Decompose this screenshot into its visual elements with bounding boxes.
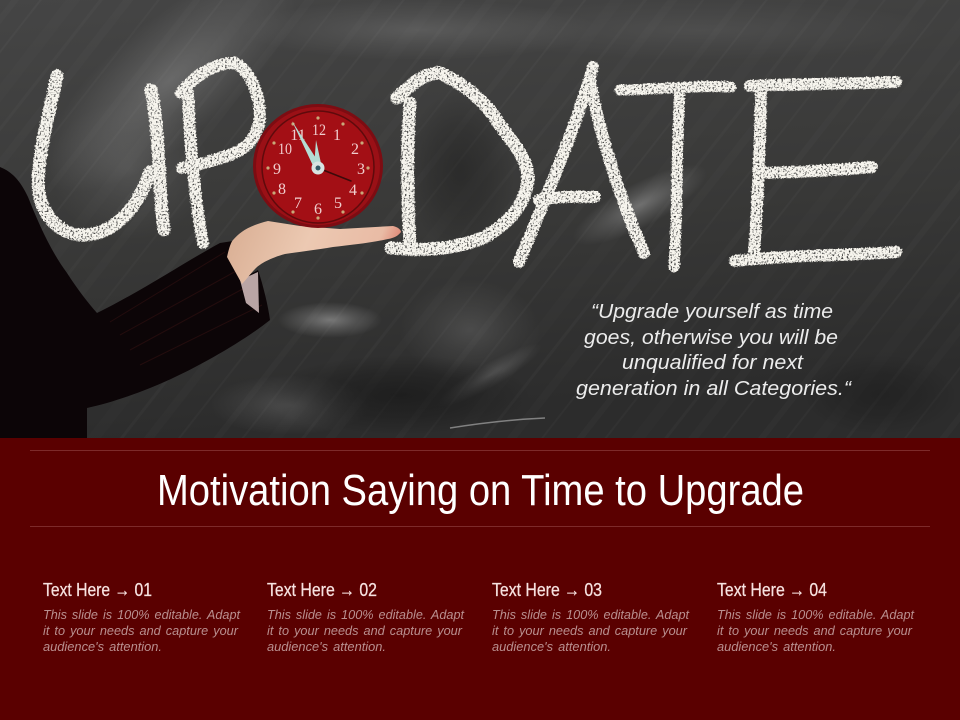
text block 04: Text Here → 04 [717, 580, 827, 600]
icon: open hand [227, 221, 401, 284]
title: Motivation Saying on Time to Upgrade [157, 466, 804, 515]
clock numerals: 3 [357, 161, 365, 178]
text block 02: This slide is 100% editable. Adapt [267, 608, 465, 622]
quote text: goes, otherwise you will be [584, 326, 838, 349]
text block 04 [717, 580, 915, 654]
text block 04: it to your needs and capture your [717, 624, 913, 638]
text block 01: Text Here → 01 [43, 580, 152, 600]
chalk letter T [620, 87, 731, 267]
clock numerals: 9 [273, 161, 281, 178]
quote text [576, 300, 852, 400]
clock numerals: 12 [312, 122, 326, 139]
icon: red alarm clock [253, 104, 383, 228]
text block 02: audience's attention. [267, 640, 386, 654]
photo: chalkboard background [0, 0, 960, 438]
panel: maroon footer [0, 438, 960, 720]
chalk letter A [519, 67, 644, 262]
chalk word: UPDATE [38, 63, 896, 267]
clock hour dots [266, 116, 370, 220]
chalk letter D [391, 73, 528, 250]
chalk letter U [38, 76, 164, 235]
text block 02: Text Here → 02 [267, 580, 377, 600]
clock hands [292, 121, 351, 181]
text block 01: it to your needs and capture your [43, 624, 239, 638]
text block 03: audience's attention. [492, 640, 611, 654]
text block 01: This slide is 100% editable. Adapt [43, 608, 241, 622]
text block 02 [267, 580, 465, 654]
text block 03 [492, 580, 690, 654]
quote text: “Upgrade yourself as time [591, 300, 833, 323]
text block 03: Text Here → 03 [492, 580, 602, 600]
chalk letter E [735, 82, 896, 261]
clock numerals: 10 [278, 141, 292, 158]
quote text: generation in all Categories.“ [576, 377, 852, 400]
clock numerals: 4 [349, 182, 357, 199]
clock numerals: 8 [278, 181, 286, 198]
chalk letter P [181, 63, 260, 243]
clock numerals [273, 122, 365, 218]
text block 01: audience's attention. [43, 640, 162, 654]
text block 04: This slide is 100% editable. Adapt [717, 608, 915, 622]
text block 03: it to your needs and capture your [492, 624, 688, 638]
text block 02: it to your needs and capture your [267, 624, 463, 638]
text block 04: audience's attention. [717, 640, 836, 654]
text block 03: This slide is 100% editable. Adapt [492, 608, 690, 622]
clock numerals: 6 [314, 201, 322, 218]
clock numerals: 2 [351, 141, 359, 158]
clock numerals: 5 [334, 195, 342, 212]
quote text: unqualified for next [622, 351, 804, 374]
clock numerals: 7 [294, 195, 302, 212]
clock numerals: 11 [290, 127, 306, 144]
clock numerals: 1 [333, 127, 341, 144]
text block 01 [43, 580, 241, 654]
icon: suited arm [0, 167, 270, 438]
